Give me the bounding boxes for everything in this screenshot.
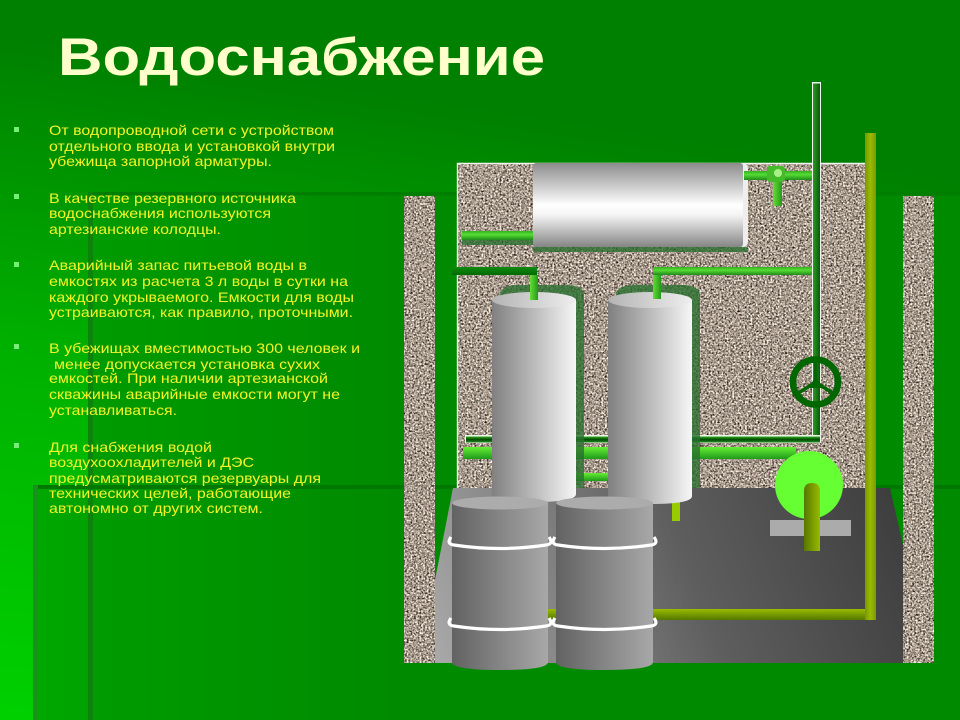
bullet list bbox=[14, 122, 360, 516]
bullet 5: предусматриваются резервуары для bbox=[49, 470, 321, 486]
bullet 4: менее допускается установка сухих bbox=[54, 356, 320, 372]
bullet 3: емкостях из расчета 3 л воды в сутки на bbox=[49, 273, 348, 289]
upper left pipe bbox=[462, 231, 533, 245]
vertical tank left bbox=[492, 275, 576, 502]
bullet 4: емкостей. При наличии артезианской bbox=[49, 370, 328, 386]
bullet 5: технических целей, работающие bbox=[49, 485, 291, 501]
feed pipes to tanks bbox=[452, 267, 812, 275]
bullet 5: воздухоохладителей и ДЭС bbox=[49, 454, 254, 470]
pump bbox=[770, 451, 851, 551]
tank shadows bbox=[500, 285, 700, 488]
bullet 4: В убежищах вместимостью 300 человек и bbox=[49, 340, 360, 356]
bullet 1: убежища запорной арматуры. bbox=[49, 153, 272, 169]
bullet 4: устанавливаться. bbox=[49, 402, 177, 418]
horizontal tank bbox=[533, 163, 748, 252]
bullet 3: устраиваются, как правило, проточными. bbox=[49, 304, 353, 320]
water supply diagram bbox=[404, 82, 934, 670]
lower pipes bbox=[463, 447, 796, 521]
barrel right bbox=[553, 496, 656, 670]
bullet 4: скважины аварийные емкости могут не bbox=[49, 386, 340, 402]
valve on tank outlet bbox=[744, 166, 812, 206]
floor bbox=[435, 488, 903, 663]
olive supply pipe bbox=[545, 133, 876, 620]
bullet 3 bbox=[14, 257, 354, 320]
barrel left bbox=[449, 496, 551, 670]
gravel walls bbox=[404, 163, 934, 663]
bullet 1: отдельного ввода и установкой внутри bbox=[49, 138, 335, 154]
bullet 4 bbox=[14, 340, 360, 418]
bullet 2 bbox=[14, 190, 296, 237]
bullet 5: Для снабжения водой bbox=[49, 439, 212, 455]
bullet 5 bbox=[14, 439, 321, 516]
vertical tank right bbox=[608, 275, 692, 504]
bullet 3: Аварийный запас питьевой воды в bbox=[49, 257, 307, 273]
bullet 5: автономно от других систем. bbox=[49, 500, 263, 516]
bullet 2: водоснабжения используются bbox=[49, 205, 271, 221]
bullet 1: От водопроводной сети с устройством bbox=[49, 122, 334, 138]
bullet 2: В качестве резервного источника bbox=[49, 190, 296, 206]
bullet 2: артезианские колодцы. bbox=[49, 221, 221, 237]
bullet 3: каждого укрываемого. Емкости для воды bbox=[49, 289, 354, 305]
sprinkler tube with white edge bbox=[465, 82, 821, 443]
bullet 1 bbox=[14, 122, 335, 169]
title: Водоснабжение bbox=[58, 28, 545, 87]
handwheel bbox=[793, 360, 838, 404]
